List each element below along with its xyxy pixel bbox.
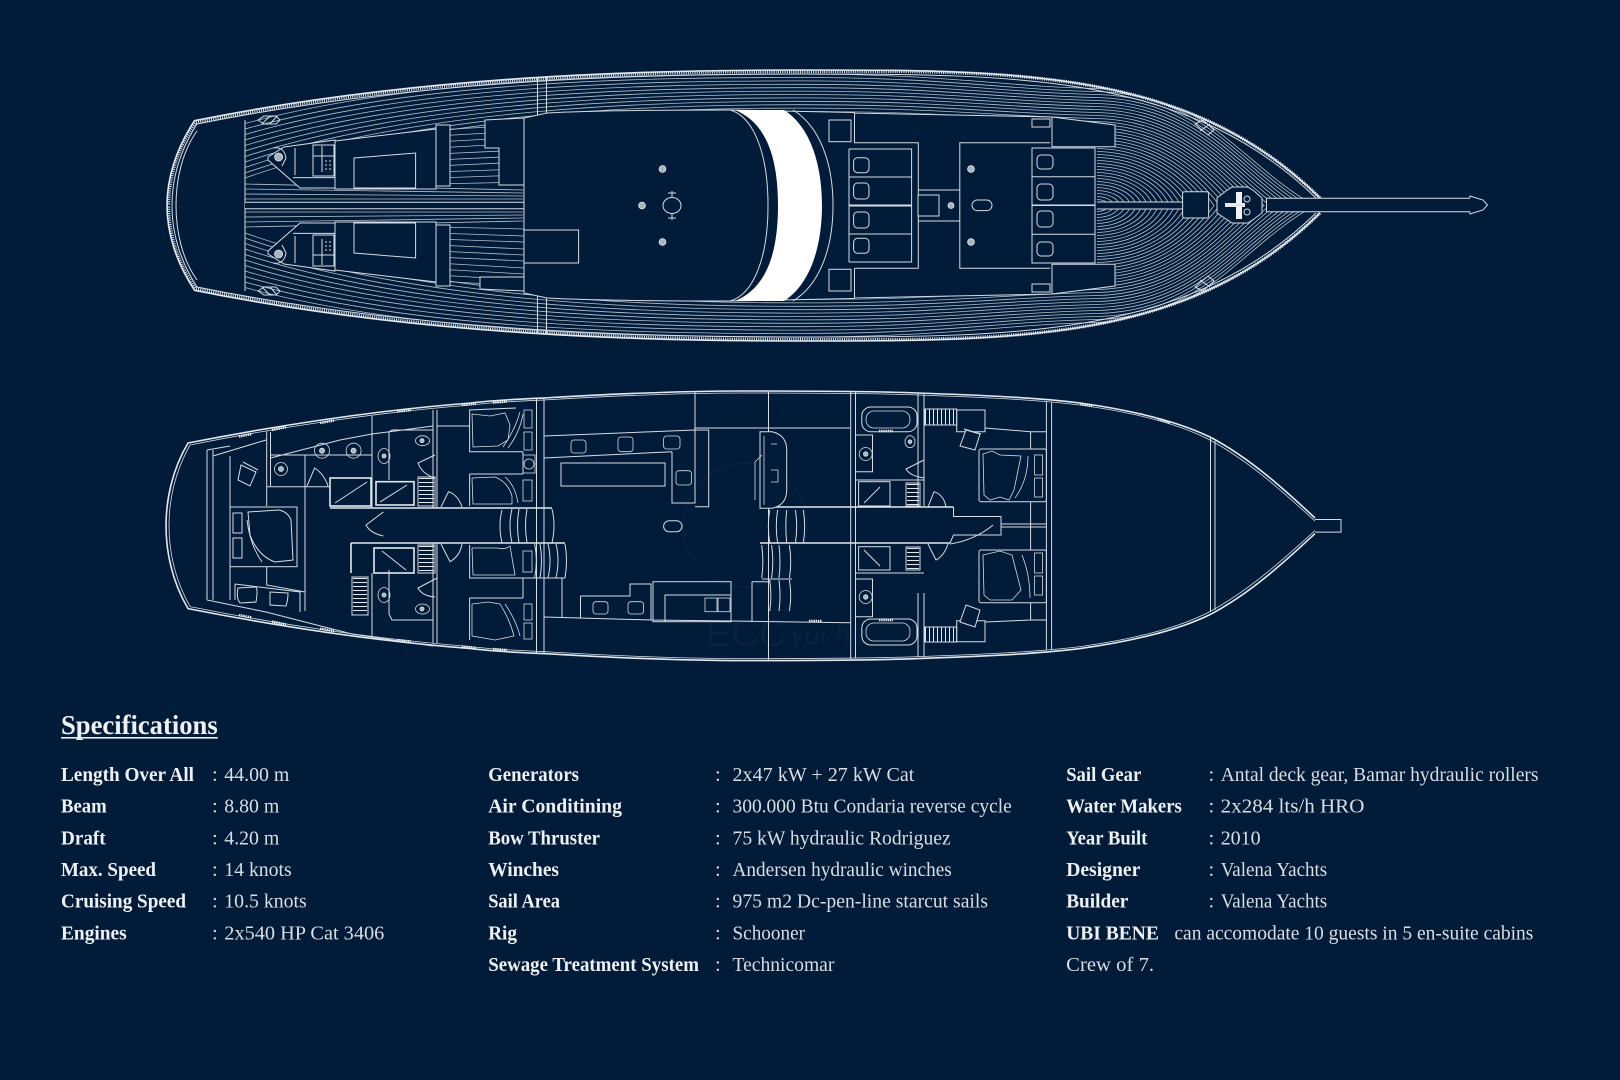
specifications column 3: [1066, 764, 1539, 976]
aft stairs: [500, 509, 566, 618]
engines: [61, 922, 384, 944]
beam: 8.80 m: [224, 796, 279, 818]
forward seat lockers: [1032, 148, 1095, 206]
winches: [488, 859, 952, 881]
bow thruster: 75 kW hydraulic Rodriguez: [732, 827, 951, 849]
forward stairs: [762, 510, 805, 611]
builder: Valena Yachts: [1221, 891, 1327, 913]
deckhouse: [524, 110, 1115, 206]
sewage treatment: [488, 954, 835, 976]
air conditioning: :: [715, 796, 721, 818]
designer: [1066, 859, 1327, 881]
lower deck plan: [166, 391, 1341, 661]
galley: [544, 582, 851, 623]
draft: 4.20 m: [224, 827, 279, 849]
cabin berths forward: [979, 428, 1046, 622]
bow thruster: :: [715, 827, 721, 849]
year built: [1066, 827, 1261, 849]
cruising speed: Cruising Speed: [61, 891, 187, 913]
bow thruster: Bow Thruster: [488, 827, 600, 849]
sail area: [488, 891, 988, 913]
watermark: ECC: [706, 613, 786, 655]
beam: [61, 796, 279, 818]
designer: Designer: [1066, 859, 1140, 881]
forward hull lugs: [809, 404, 1170, 621]
rig: Rig: [488, 922, 518, 944]
accommodation note: can accomodate 10 guests in 5 en-suite cabins: [1174, 922, 1533, 944]
hatch square: [829, 120, 851, 142]
forward deck block: [854, 113, 1115, 206]
draft: [61, 827, 279, 849]
rig: [488, 922, 805, 944]
generators: [488, 764, 915, 786]
max speed: [61, 859, 292, 881]
draft: :: [212, 827, 218, 849]
doors: [307, 455, 993, 597]
sail area: Sail Area: [488, 891, 560, 913]
crew note: Crew of 7.: [1066, 954, 1154, 976]
aft seat lockers: [849, 149, 912, 206]
accommodation note: UBI BENE: [1066, 922, 1159, 944]
water makers: [1066, 796, 1364, 818]
winches: :: [715, 859, 721, 881]
winch: [275, 153, 283, 161]
transom inner rim: [176, 131, 197, 206]
specifications column 1: [61, 764, 384, 944]
white skylight: [735, 110, 822, 206]
stern lockers asymmetry: [485, 118, 524, 185]
length over all: 44.00 m: [224, 764, 289, 786]
year built: Year Built: [1066, 827, 1148, 849]
king plank: [245, 202, 1183, 206]
specifications column 2: [488, 764, 1012, 976]
forward bathrooms: [856, 435, 924, 617]
sail gear: Sail Gear: [1066, 764, 1141, 786]
year built: :: [1208, 827, 1214, 849]
generators: Generators: [488, 764, 579, 786]
cruising speed: [61, 891, 307, 913]
cleat bow: [1195, 120, 1214, 135]
engines: :: [212, 922, 218, 944]
top deck plan: [167, 70, 1488, 341]
anchor windlass: [1183, 187, 1262, 223]
aft bathrooms: [274, 430, 433, 620]
armchair: [238, 462, 258, 486]
designer: Valena Yachts: [1221, 859, 1327, 881]
bow thruster: [488, 827, 951, 849]
helm station: [755, 432, 787, 508]
max speed: Max. Speed: [61, 859, 157, 881]
year built: 2010: [1221, 827, 1261, 849]
water makers: 2x284 lts/h HRO: [1221, 796, 1364, 818]
air conditioning: 300.000 Btu Condaria reverse cycle: [732, 796, 1012, 818]
stern panel line: [244, 120, 246, 206]
mirrored hull: [166, 526, 1341, 661]
draft: Draft: [61, 827, 106, 849]
rig: :: [715, 922, 721, 944]
sail gear: [1066, 764, 1539, 786]
rig: Schooner: [732, 922, 805, 944]
length over all: [61, 764, 289, 786]
teak deck planking: [245, 74, 1314, 206]
hull lugs: [239, 402, 507, 436]
winches: Andersen hydraulic winches: [732, 859, 952, 881]
central corridor: [330, 507, 954, 573]
bowsprit: [1266, 196, 1488, 214]
aft double bed: [230, 507, 297, 567]
cruising speed: :: [212, 891, 218, 913]
watermark: yachts: [787, 615, 872, 651]
max speed: 14 knots: [224, 859, 292, 881]
sail area: 975 m2 Dc-pen-line starcut sails: [732, 891, 988, 913]
hull rim: [168, 71, 1320, 206]
watermark: [683, 463, 872, 655]
engines: Engines: [61, 922, 127, 944]
cruising speed: 10.5 knots: [224, 891, 307, 913]
length over all: :: [212, 764, 218, 786]
sewage treatment: Sewage Treatment System: [488, 954, 699, 976]
ladders: [352, 417, 956, 634]
bulkheads: [372, 391, 1215, 660]
sewage treatment: Technicomar: [732, 954, 835, 976]
engines: 2x540 HP Cat 3406: [224, 922, 384, 944]
center fittings: [639, 191, 1095, 220]
water makers: :: [1208, 796, 1214, 818]
water makers: Water Makers: [1066, 796, 1182, 818]
air conditioning: [488, 796, 1012, 818]
forward chairs: [925, 409, 985, 642]
hull outline: [166, 391, 1341, 526]
aft sofas: [235, 584, 300, 612]
length over all: Length Over All: [61, 764, 194, 786]
midships rib: [538, 77, 546, 115]
generators: 2x47 kW + 27 kW Cat: [732, 764, 915, 786]
sail gear: :: [1208, 764, 1214, 786]
winches: Winches: [488, 859, 559, 881]
builder: [1066, 891, 1327, 913]
deck fitting: [659, 166, 666, 172]
compass: [523, 455, 535, 473]
specifications heading: Specifications: [61, 710, 218, 740]
max speed: :: [212, 859, 218, 881]
mirrored deck half: [167, 205, 1320, 341]
builder: :: [1208, 891, 1214, 913]
saloon bench and table: [544, 428, 850, 532]
bathtubs: [862, 407, 917, 645]
cockpit seat: [268, 140, 335, 188]
sail gear: Antal deck gear, Bamar hydraulic rollers: [1221, 764, 1539, 786]
beam: :: [212, 796, 218, 818]
beam: Beam: [61, 796, 107, 818]
cleat stern: [258, 116, 280, 124]
shower stalls: [330, 478, 890, 573]
sail area: :: [715, 891, 721, 913]
builder: Builder: [1066, 891, 1128, 913]
sewage treatment: :: [715, 954, 721, 976]
air conditioning: Air Conditining: [488, 796, 623, 818]
aft cabin walls: [207, 426, 433, 646]
cabin berths aft: [437, 408, 532, 640]
designer: :: [1208, 859, 1214, 881]
cockpit well: [335, 129, 436, 189]
generators: :: [715, 764, 721, 786]
